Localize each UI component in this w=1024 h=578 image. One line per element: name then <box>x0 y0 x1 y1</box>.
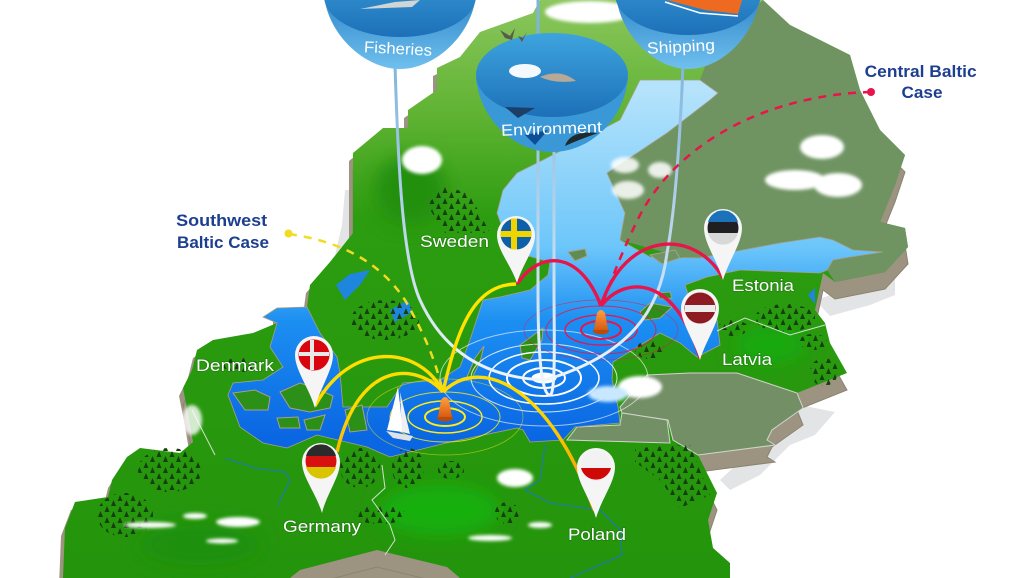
islands <box>233 249 680 432</box>
bubble: environment <box>476 33 628 152</box>
beacon: red site <box>593 310 609 334</box>
yellow target rings <box>367 379 523 455</box>
baltic sea <box>228 80 883 457</box>
land left-facing side walls <box>59 8 596 578</box>
country labels: Denmark <box>196 356 275 375</box>
callout: central baltic case: Case <box>902 83 942 102</box>
pin: poland <box>577 448 615 518</box>
country labels: Latvia <box>722 350 773 369</box>
sailboat <box>386 387 413 441</box>
country labels: Sweden <box>420 232 489 251</box>
arcs: yellow southwest links <box>315 284 594 510</box>
red target rings <box>524 300 678 360</box>
lakes <box>336 270 815 322</box>
land colour patches <box>140 156 805 565</box>
white target rings: shared sea impact <box>440 330 648 426</box>
country labels: Poland <box>568 525 626 544</box>
finland and grey non-case land <box>607 0 908 282</box>
callout: southwest baltic case: Southwest <box>176 211 267 230</box>
callout: central baltic case: Central Baltic <box>865 62 977 81</box>
arcs: red central links <box>517 244 723 358</box>
country labels <box>196 232 795 544</box>
kaliningrad grey region <box>567 413 670 443</box>
lithuania grey region <box>620 373 803 455</box>
pin: denmark <box>295 336 333 408</box>
tube: environment <box>538 0 554 395</box>
bubble: shipping: Shipping <box>647 37 715 58</box>
ground shadow <box>300 190 895 578</box>
beacon: yellow site <box>437 397 453 422</box>
dashed line: southwest baltic case <box>289 234 442 388</box>
clouds <box>124 1 862 544</box>
bubble: shipping <box>615 0 761 69</box>
dot: southwest <box>284 230 292 238</box>
pin: latvia <box>681 289 719 360</box>
country labels: Germany <box>283 517 362 536</box>
tube: shipping <box>545 65 683 380</box>
birds <box>500 28 527 42</box>
tube: fisheries <box>395 65 545 380</box>
dot: central <box>867 88 875 96</box>
pin: germany <box>302 443 340 513</box>
bubble: environment: Environment <box>501 119 603 140</box>
river and border lines <box>192 318 825 578</box>
dashed line: central baltic case <box>601 92 871 306</box>
callout: southwest baltic case: Baltic Case <box>177 233 269 252</box>
pin: estonia <box>704 209 742 280</box>
pin: sweden <box>497 216 535 283</box>
country labels: Estonia <box>732 276 795 295</box>
bubble: fisheries <box>324 0 476 69</box>
bubble: fisheries: Fisheries <box>364 39 432 60</box>
forests <box>97 185 838 537</box>
